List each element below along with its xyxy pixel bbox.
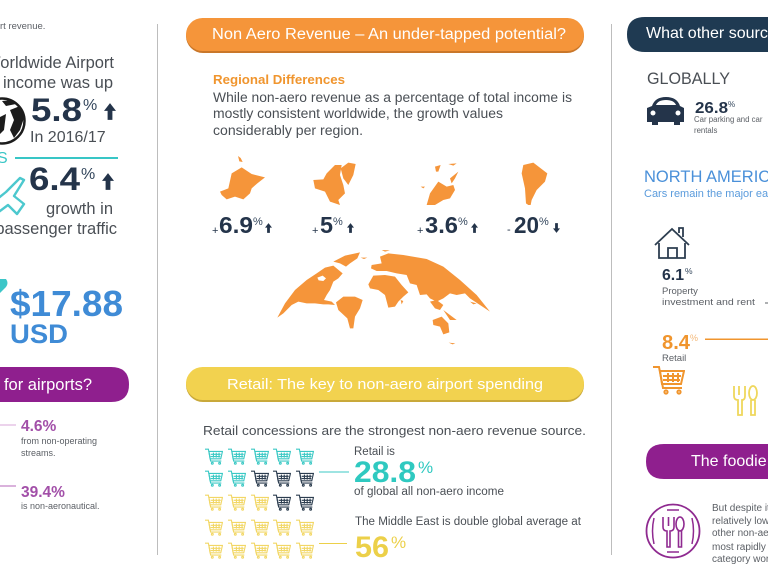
text block: regional intro: mostly consistent worldwide, the growth values xyxy=(213,106,503,121)
stat: 4.6% xyxy=(0,418,97,458)
stat: car parking 26.8%: rentals xyxy=(694,126,718,135)
map: Asia xyxy=(220,156,265,199)
icon: yellow fork and spoon xyxy=(734,386,757,415)
stat: Europe +3.6%: + xyxy=(417,225,423,237)
stat: South America -20%: - xyxy=(507,224,511,236)
pill heading: for airports xyxy=(0,367,129,402)
stat: income growth 5.8%: In 2016/17 xyxy=(30,129,106,146)
stat: retail 8.4%: % xyxy=(690,333,698,343)
stat: car parking 26.8%: Car parking and car xyxy=(694,115,763,124)
stat: car parking 26.8%: 26.8 xyxy=(695,100,728,117)
icon: purple plate with cutlery xyxy=(646,504,700,558)
stat: retail 8.4%: 8.4 xyxy=(662,332,691,354)
stat: $17.88 USD: $17.88 xyxy=(10,283,123,324)
stat: Middle East 56%: % xyxy=(391,533,406,552)
stat: car parking 26.8% xyxy=(694,100,763,135)
stat: income growth 5.8%: % xyxy=(83,97,97,114)
icon: globe xyxy=(0,98,24,144)
stat: South America -20%: 20 xyxy=(514,212,539,238)
left column: airport income statement: income was up xyxy=(3,74,113,92)
pill heading: retail: Retail: The key to non-aero airport spending xyxy=(227,376,543,393)
icon: house xyxy=(655,228,689,258)
stat: 39.4% xyxy=(0,484,100,511)
icon: car xyxy=(647,97,684,125)
stat: retail 8.4%: Retail xyxy=(662,353,686,364)
stat: income growth 5.8% xyxy=(30,92,116,146)
stat: Asia +6.9% xyxy=(212,212,272,238)
stat: Middle East 56%: 56 xyxy=(355,531,389,564)
pill heading: the foodie xyxy=(646,444,768,479)
stat: retail 28.8%: 28.8 xyxy=(354,456,416,489)
heading: regional differences: Regional Differences xyxy=(213,72,345,87)
stat: property 6.1% xyxy=(662,266,768,308)
stat: income growth 5.8%: 5.8 xyxy=(31,92,82,128)
pill heading: non aero revenue: Non Aero Revenue – An under-tapped potential? xyxy=(212,26,566,43)
stat: North America +5%: + xyxy=(312,225,318,237)
stat: retail 28.8% xyxy=(354,446,504,498)
text block: regional intro: considerably per region. xyxy=(213,123,363,138)
stat: Asia +6.9%: 6.9 xyxy=(219,212,253,238)
text block: foodie description: most rapidly xyxy=(712,542,766,553)
map: Europe xyxy=(421,163,458,205)
text block: foodie description: relatively low xyxy=(712,516,768,527)
stat: South America -20% xyxy=(507,212,560,238)
icon: orange cart xyxy=(653,367,684,394)
stat: 4.6%: 4.6% xyxy=(21,418,57,435)
pill heading: retail xyxy=(186,367,584,402)
stat: $17.88 USD: USD xyxy=(10,319,68,349)
stat: retail 28.8%: % xyxy=(418,458,433,477)
stat: retail 8.4% xyxy=(662,332,768,364)
stat: property 6.1%: Property xyxy=(662,286,698,297)
map: North America xyxy=(313,163,356,205)
left column: airport income statement xyxy=(0,54,114,92)
stat: property 6.1%: 6.1 xyxy=(662,267,684,284)
icon: teal tip xyxy=(0,279,8,293)
stat: Asia +6.9%: + xyxy=(212,225,218,237)
stat: Europe +3.6%: 3.6 xyxy=(425,212,458,238)
teal separator with letter xyxy=(0,150,118,167)
pill heading: non aero revenue xyxy=(186,18,584,53)
stat: Europe +3.6%: % xyxy=(458,216,468,228)
stat: South America -20%: % xyxy=(539,216,549,228)
text block: regional intro xyxy=(213,90,572,138)
stat: 4.6%: from non-operating xyxy=(21,436,97,446)
left column: intro text fragment: rt revenue. xyxy=(0,21,45,32)
stat: retail 28.8%: Retail is xyxy=(354,446,395,458)
icon: plane xyxy=(0,178,24,214)
stat: North America +5%: % xyxy=(333,216,343,228)
stat: passenger growth 6.4% xyxy=(0,161,117,238)
pill heading: the foodie: The foodie xyxy=(691,453,767,470)
stat: North America +5% xyxy=(312,212,354,238)
stat: 39.4%: 39.4% xyxy=(21,484,65,501)
stat: Middle East 56%: The Middle East is double global average at xyxy=(355,516,582,528)
stat: property 6.1%: investment and rent xyxy=(662,297,755,308)
pill heading: other sources xyxy=(627,17,768,52)
stat: Europe +3.6% xyxy=(417,212,478,238)
heading: globally: GLOBALLY xyxy=(647,70,730,88)
text block: retail intro: Retail concessions are the strongest non-aero revenue source. xyxy=(203,423,586,438)
stat: Asia +6.9%: % xyxy=(253,216,263,228)
stat: passenger growth 6.4%: growth in xyxy=(46,200,113,218)
pictogram chart: carts xyxy=(205,449,313,558)
map: world dome xyxy=(277,250,490,344)
text block: regional intro: While non-aero revenue as a percentage of total income is xyxy=(213,90,572,105)
stat: 39.4%: is non-aeronautical. xyxy=(21,501,100,511)
stat: Middle East 56% xyxy=(355,516,582,564)
stat: passenger growth 6.4%: % xyxy=(81,166,95,183)
text block: foodie description xyxy=(712,503,768,565)
map: South America xyxy=(522,163,547,205)
stat: car parking 26.8%: % xyxy=(728,100,735,109)
stat: 4.6%: streams. xyxy=(21,448,56,458)
stat: $17.88 USD xyxy=(10,283,123,349)
stat: passenger growth 6.4%: 6.4 xyxy=(29,161,80,197)
stat: retail 28.8%: of global all non-aero income xyxy=(354,486,504,498)
stat: property 6.1%: % xyxy=(685,266,693,276)
stat: North America +5%: 5 xyxy=(320,212,333,238)
